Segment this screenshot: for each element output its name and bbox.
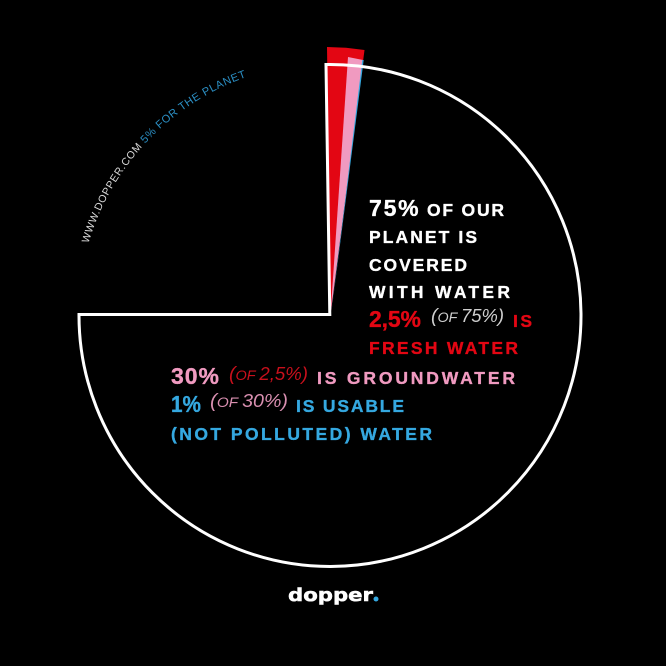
text block: 75% of our planet: COVERED — [369, 255, 467, 275]
text block: 1% usable water: (NOT POLLUTED) WATER — [171, 424, 432, 444]
text block: 75% of our planet: 75% OF OUR — [369, 195, 504, 221]
curved text: website and 5% for the planet: WWW.DOPPER.COM 5% FOR THE PLANET — [82, 70, 244, 242]
text block: 30% groundwater: IS GROUNDWATER — [317, 368, 515, 388]
text block: 2,5% fresh water: 2,5% — [369, 306, 421, 332]
text block: 75% of our planet — [369, 195, 510, 302]
circle outline: 75 percent of planet — [79, 64, 581, 566]
logo: dopper: dopper — [288, 585, 373, 606]
text block: 2,5% fresh water: IS — [513, 311, 532, 331]
wedge: groundwater (pink) — [330, 57, 363, 315]
text block: 1% usable water — [171, 391, 432, 444]
wedge: usable water (blue) — [331, 60, 364, 315]
wedge: fresh water (red) — [327, 47, 364, 315]
text block: 2,5% fresh water — [369, 306, 532, 358]
text block: 1% usable water: 1% — [171, 391, 201, 417]
text block: 2,5% fresh water: (OF 75%) — [431, 306, 504, 327]
text block: 30% groundwater — [171, 363, 515, 389]
text block: 2,5% fresh water: FRESH WATER — [369, 338, 518, 358]
text block: 75% of our planet: WITH WATER — [369, 282, 510, 302]
text block: 30% groundwater: (OF 2,5%) — [229, 364, 308, 385]
text block: 1% usable water: IS USABLE — [296, 396, 404, 416]
text block: 1% usable water: (OF 30%) — [210, 391, 288, 412]
text block: 30% groundwater: 30% — [171, 363, 219, 389]
pie chart — [79, 47, 581, 566]
logo blue dot — [374, 596, 378, 602]
text block: 75% of our planet: PLANET IS — [369, 227, 477, 247]
